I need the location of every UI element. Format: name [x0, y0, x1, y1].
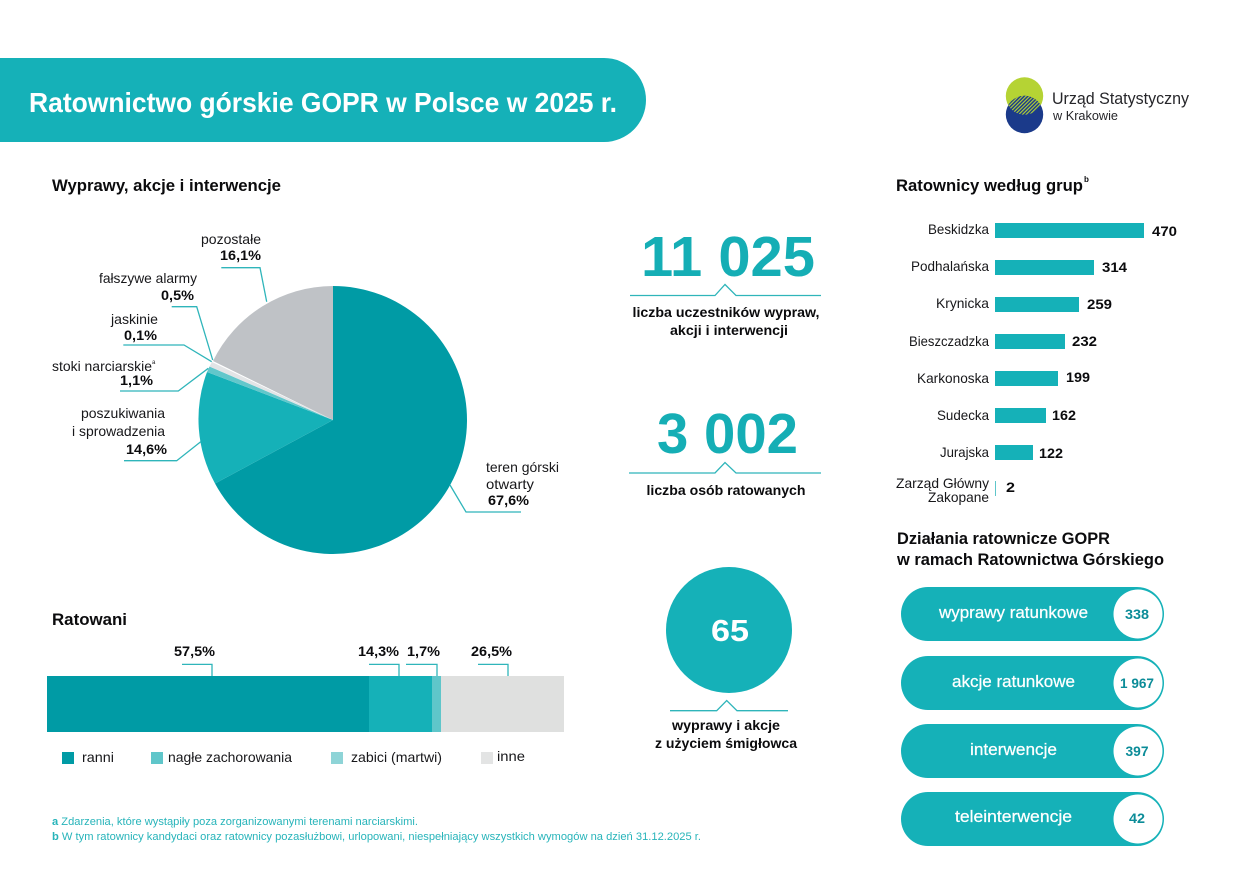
pie label: pozostałe: [201, 231, 267, 302]
heading: Ratowani: Ratowani: [52, 610, 127, 629]
slice: fałszywe alarmy: [210, 362, 333, 420]
pill: interwencje: interwencje: [970, 740, 1057, 759]
bar: Jurajska: [940, 444, 1063, 461]
stat: wyprawy z użyciem śmigłowca: 65: [711, 613, 749, 648]
stat: wyprawy z użyciem śmigłowca: [655, 567, 797, 751]
bar: Krynicka: 259: [1087, 296, 1112, 312]
stat: wyprawy z użyciem śmigłowca: wyprawy i akcje: [671, 717, 780, 733]
slice: pozostałe: [213, 286, 333, 420]
pie label: pozostałe: pozostałe: [201, 231, 261, 247]
bar: Zarząd Główny Zakopane: Zakopane: [928, 489, 989, 505]
pill: teleinterwencje: 42: [1129, 811, 1145, 826]
logo: Urząd Statystyczny w Krakowie: Urząd Statystyczny: [1052, 89, 1189, 108]
bar: Podhalańska: [911, 258, 1127, 275]
bar: Sudecka: [937, 407, 1076, 423]
pie label: poszukiwania i sprowadzenia: i sprowadzenia: [72, 423, 165, 439]
bar value labels: [174, 643, 513, 676]
pie label: fałszywe alarmy: [99, 270, 213, 360]
bar: Beskidzka: 470: [1152, 223, 1177, 239]
stacked bar: ratowani: [47, 676, 564, 732]
slice: teren górski otwarty: [215, 286, 467, 554]
bar: Sudecka: Sudecka: [937, 407, 989, 423]
footnotes: [52, 816, 701, 843]
pie label: fałszywe alarmy: fałszywe alarmy: [99, 270, 197, 286]
stat: wyprawy z użyciem śmigłowca: z użyciem śmigłowca: [655, 735, 797, 751]
bar: Podhalańska: 314: [1102, 259, 1127, 275]
pie label: jaskinie: jaskinie: [110, 311, 158, 327]
bar: Bieszczadzka: 232: [1072, 333, 1097, 349]
bar: Karkonoska: Karkonoska: [917, 370, 989, 386]
pie label: stoki narciarskie: stoki narciarskie: [52, 358, 152, 374]
heading: Działania ratownicze GOPR: Działania ratownicze GOPR: [897, 529, 1110, 548]
bar: Bieszczadzka: [909, 333, 1097, 349]
footnotes: b W tym ratownicy kandydaci oraz ratownicy pozasłużbowi, urlopowani, niespełniający wszystkich wymogów na dzień 31.12.2025 r.: [52, 831, 701, 843]
pie label: poszukiwania i sprowadzenia: [72, 405, 201, 461]
bar value labels: 57,5%: [174, 643, 216, 659]
bar value labels: 14,3%: [358, 643, 400, 659]
stat: liczba osób ratowanych: liczba osób ratowanych: [646, 482, 806, 498]
bar: Sudecka: 162: [1052, 407, 1076, 423]
heading: Działania ratownicze GOPR: [896, 529, 1164, 569]
pill: wyprawy ratunkowe: [901, 587, 1164, 641]
pill: akcje ratunkowe: akcje ratunkowe: [952, 672, 1075, 691]
stat: liczba uczestników: liczba uczestników wypraw,: [632, 304, 820, 320]
bar: Podhalańska: Podhalańska: [911, 258, 989, 274]
pie label: poszukiwania i sprowadzenia: 14,6%: [126, 441, 168, 457]
pie label: stoki narciarskie: 1,1%: [120, 372, 154, 388]
slice: poszukiwania i sprowadzenia: [198, 372, 333, 484]
bar: Krynicka: [936, 295, 1112, 312]
bar: Zarząd Główny Zakopane: Zarząd Główny: [896, 475, 989, 491]
bar: Karkonoska: 199: [1066, 369, 1090, 385]
slice: stoki narciarskie: [207, 366, 333, 420]
bar: Bieszczadzka: Bieszczadzka: [909, 333, 989, 349]
pie label: stoki narciarskie: a: [152, 360, 156, 366]
stat: liczba osób ratowanych: 3 002: [657, 402, 798, 466]
bar: Jurajska: Jurajska: [940, 444, 989, 460]
pie label: fałszywe alarmy: 0,5%: [161, 287, 195, 303]
logo: Urząd Statystyczny w Krakowie: w Krakowie: [1052, 108, 1118, 123]
bar: Jurajska: 122: [1039, 445, 1063, 461]
pie label: teren górski otwarty: [450, 459, 559, 512]
pie label: teren górski otwarty: otwarty: [486, 476, 534, 492]
legend: inne: [497, 748, 525, 764]
pill: akcje ratunkowe: 1 967: [1120, 676, 1154, 691]
stat: liczba uczestników: akcji i interwencji: [670, 322, 788, 338]
title banner: [0, 58, 646, 142]
bar: Beskidzka: Beskidzka: [928, 221, 989, 237]
pie label: poszukiwania i sprowadzenia: poszukiwania: [81, 405, 165, 421]
logo: Urząd Statystyczny w Krakowie: [1006, 77, 1189, 133]
heading: Ratownicy według grup: Ratownicy według grup: [896, 176, 1083, 195]
pie label: teren górski otwarty: 67,6%: [488, 492, 530, 508]
footnotes: a Zdarzenia, które wystąpiły poza zorganizowanymi terenami narciarskimi.: [52, 816, 418, 828]
legend: [62, 748, 525, 765]
pill: wyprawy ratunkowe: wyprawy ratunkowe: [938, 603, 1088, 622]
bar: Karkonoska: [917, 369, 1090, 386]
bar chart: ratownicy według grup: [896, 221, 1177, 505]
pill: wyprawy ratunkowe: 338: [1125, 607, 1150, 622]
legend: zabici (martwi): [351, 749, 442, 765]
pie label: teren górski otwarty: teren górski: [486, 459, 559, 475]
pie label: jaskinie: [110, 311, 212, 362]
bar: Krynicka: Krynicka: [936, 295, 989, 311]
stat: liczba uczestników: [630, 225, 821, 338]
bar value labels: 1,7%: [407, 643, 441, 659]
title banner: Ratownictwo górskie GOPR w Polsce w 2025 r.: [29, 87, 617, 118]
pie label: pozostałe: 16,1%: [220, 247, 262, 263]
heading: Wyprawy, akcje i interwencje: Wyprawy, akcje i interwencje: [52, 176, 281, 195]
stat: liczba osób ratowanych: [629, 402, 821, 498]
pill: teleinterwencje: teleinterwencje: [955, 807, 1072, 826]
bar: Zarząd Główny Zakopane: [896, 475, 1015, 505]
legend: nagłe zachorowania: [168, 749, 292, 765]
pie label: jaskinie: 0,1%: [124, 327, 158, 343]
pill: interwencje: 397: [1126, 744, 1148, 759]
stat: liczba uczestników: 11 025: [641, 225, 815, 289]
bar value labels: 26,5%: [471, 643, 513, 659]
pill: akcje ratunkowe: [901, 656, 1164, 710]
bar: Zarząd Główny Zakopane: 2: [1006, 479, 1015, 495]
pie chart: [198, 286, 467, 554]
pie label: stoki narciarskie: [52, 358, 208, 391]
heading: Działania ratownicze GOPR: w ramach Ratownictwa Górskiego: [896, 550, 1164, 569]
pill: teleinterwencje: [901, 792, 1164, 846]
heading: Ratownicy według grup: b: [1084, 175, 1089, 184]
bar: Beskidzka: [928, 221, 1177, 239]
legend: ranni: [82, 749, 114, 765]
pill: interwencje: [901, 724, 1164, 778]
